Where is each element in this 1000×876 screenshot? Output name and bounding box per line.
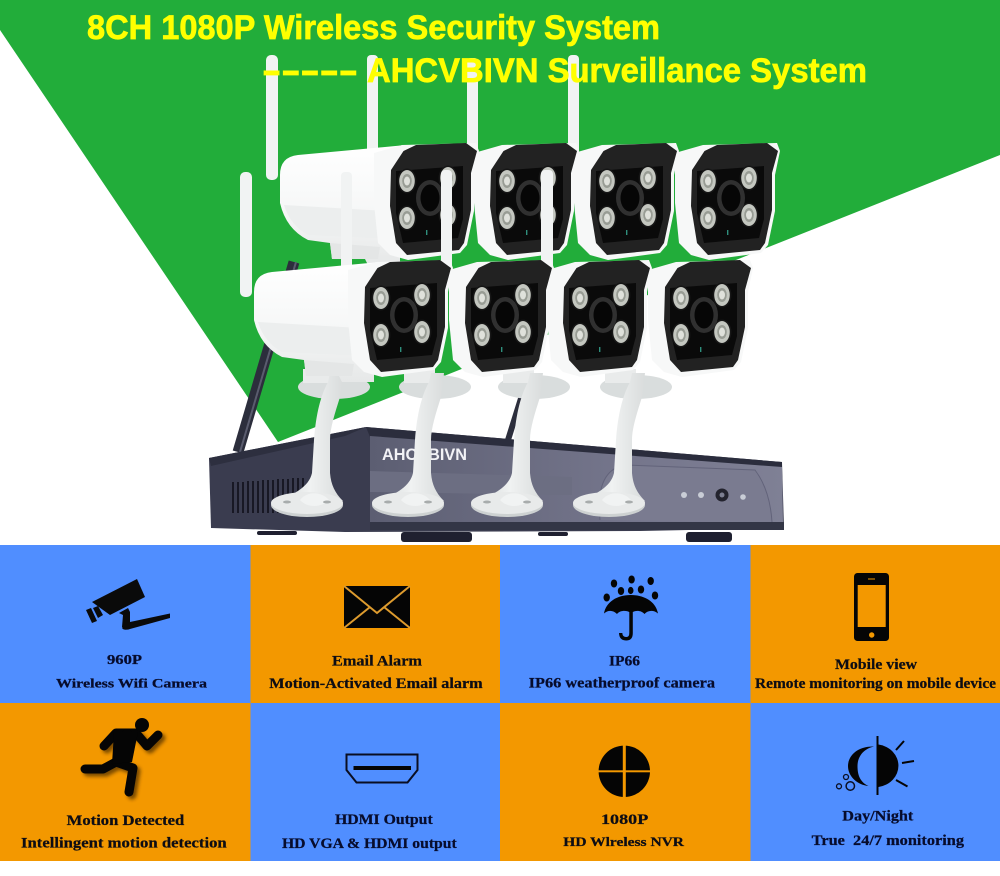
heading: HDMI Output bbox=[335, 812, 433, 828]
feature panel: 1080P NVR bbox=[500, 703, 750, 861]
feature panel: mobile view bbox=[750, 545, 1000, 703]
heading: 1080P bbox=[601, 812, 648, 828]
feature panel: 960P camera bbox=[0, 545, 250, 703]
wall mount stands bbox=[271, 369, 672, 517]
title line 1: 8CH 1080P Wireless Security System bbox=[87, 9, 660, 47]
front row cameras bbox=[254, 260, 753, 382]
back row antennas bbox=[266, 55, 579, 180]
icon: umbrella with rain bbox=[604, 576, 658, 640]
description: True 24/7 monitoring bbox=[812, 833, 965, 849]
feature panel: motion detected bbox=[0, 703, 250, 861]
NVR status lights and knob bbox=[681, 488, 746, 502]
title line 2: AHCVBIVN Surveillance System bbox=[367, 52, 867, 90]
NVR recorder bbox=[209, 427, 784, 542]
heading: Motion Detected bbox=[67, 813, 185, 829]
description: Wireless Wifi Camera bbox=[56, 676, 208, 690]
front row antennas bbox=[240, 170, 553, 297]
NVR brand logo: AHCVBIVN bbox=[382, 445, 467, 464]
back row cameras bbox=[280, 143, 780, 265]
description: Intellingent motion detection bbox=[21, 835, 227, 851]
product photo: wireless cameras and NVR recorder bbox=[209, 55, 784, 542]
heading: Email Alarm bbox=[332, 654, 423, 670]
description: Motion-Activated Email alarm bbox=[269, 676, 483, 692]
feature panel: day and night bbox=[750, 703, 1000, 861]
NVR vent slots bbox=[233, 478, 303, 513]
description: HD VGA & HDMI output bbox=[282, 836, 457, 852]
green angled backdrop bbox=[0, 0, 1000, 442]
heading: IP66 bbox=[609, 654, 641, 670]
heading: Mobile view bbox=[835, 657, 917, 673]
title bbox=[87, 9, 867, 90]
NVR feet bbox=[257, 531, 732, 542]
heading: Day/Night bbox=[842, 808, 913, 824]
icon: segmented disc bbox=[598, 745, 651, 798]
icon: smartphone bbox=[854, 573, 889, 641]
icon: envelope bbox=[344, 586, 410, 628]
NVR antennas bbox=[238, 262, 523, 452]
description: IP66 weatherproof camera bbox=[529, 676, 716, 692]
icon: sun and moon bbox=[836, 736, 914, 795]
description: HD Wlreless NVR bbox=[563, 834, 685, 849]
title line 2 dashes: ----- bbox=[262, 52, 358, 90]
description: Remote monitoring on mobile device bbox=[755, 676, 997, 692]
feature panel: email alarm bbox=[250, 545, 500, 703]
feature panel: HDMI output bbox=[250, 703, 500, 861]
feature panel: IP66 bbox=[500, 545, 750, 703]
icon: HDMI port bbox=[346, 754, 418, 782]
icon: running person bbox=[85, 718, 161, 795]
icon: security camera bbox=[86, 579, 170, 630]
heading: 960P bbox=[107, 653, 143, 668]
